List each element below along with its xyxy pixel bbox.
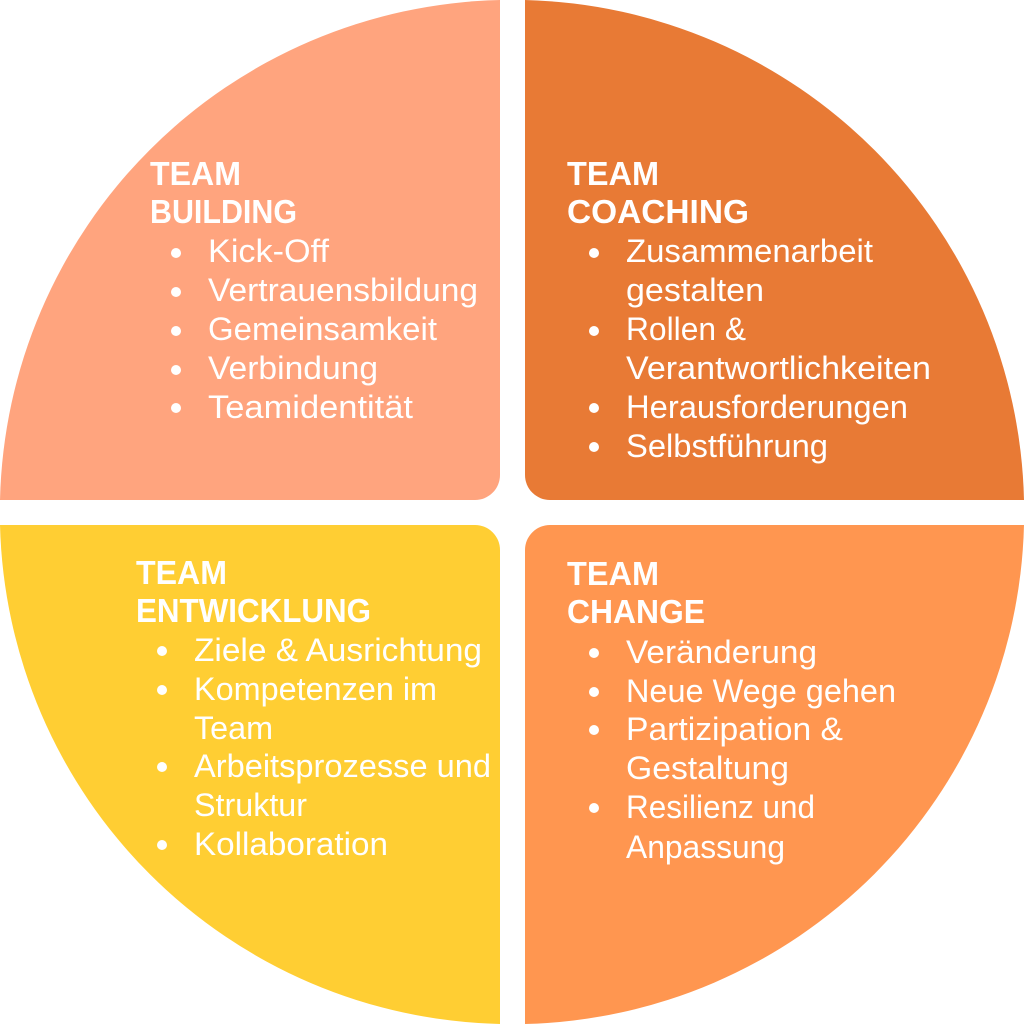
list: team entwicklung topics: Team (194, 710, 273, 746)
panel: team change (525, 525, 1024, 1024)
list: team entwicklung topics: Kompetenzen im (194, 671, 437, 707)
heading: team entwicklung: ENTWICKLUNG (136, 592, 371, 629)
heading: team coaching: TEAM (567, 155, 659, 192)
list: team building topics: Kick-Off (208, 233, 329, 269)
heading: team entwicklung: TEAM (136, 554, 227, 591)
list: team entwicklung topics: Ziele & Ausrichtung (194, 632, 482, 668)
list: team entwicklung topics: Struktur (194, 787, 307, 823)
list: team entwicklung topics: Kollaboration (194, 826, 388, 862)
list: team coaching topics (589, 233, 931, 464)
heading: team change (567, 555, 705, 630)
list: team building topics: Gemeinsamkeit (208, 311, 437, 347)
list: team change topics: Veränderung (626, 634, 817, 670)
panel: team building (0, 0, 500, 500)
heading: team coaching (567, 155, 749, 230)
list: team change topics: Neue Wege gehen (626, 673, 896, 709)
list: team coaching topics: Zusammenarbeit (626, 233, 873, 269)
panel: team entwicklung (0, 525, 500, 1024)
list: team coaching topics: Herausforderungen (626, 389, 908, 425)
list: team coaching topics: Verantwortlichkeiten (626, 350, 931, 386)
list: team coaching topics: Selbstführung (626, 428, 828, 464)
list: team building topics (171, 233, 478, 425)
list: team building topics: Verbindung (208, 350, 378, 386)
list: team change topics: Resilienz und (626, 789, 815, 825)
list: team coaching topics: gestalten (626, 272, 764, 308)
heading: team change: TEAM (567, 555, 659, 592)
list: team change topics (589, 634, 896, 865)
heading: team building (150, 155, 297, 230)
list: team building topics: Teamidentität (208, 389, 413, 425)
list: team coaching topics: Rollen & (626, 311, 746, 347)
list: team entwicklung topics (157, 632, 491, 862)
list: team change topics: Gestaltung (626, 750, 789, 786)
heading: team entwicklung (136, 554, 371, 629)
panel: team coaching (525, 0, 1024, 500)
list: team building topics: Vertrauensbildung (208, 272, 478, 308)
list: team change topics: Partizipation & (626, 711, 843, 747)
heading: team building: BUILDING (150, 193, 297, 230)
heading: team building: TEAM (150, 155, 241, 192)
heading: team change: CHANGE (567, 593, 705, 630)
heading: team coaching: COACHING (567, 193, 749, 230)
list: team change topics: Anpassung (626, 829, 785, 865)
list: team entwicklung topics: Arbeitsprozesse und (194, 748, 491, 784)
